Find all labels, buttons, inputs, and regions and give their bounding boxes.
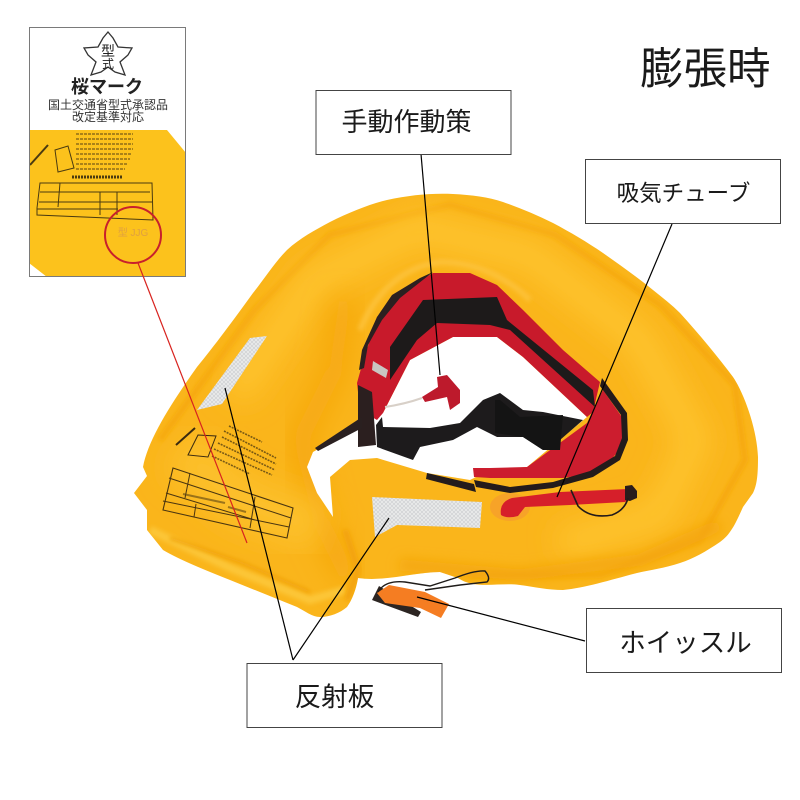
black waist strap and buckle — [315, 385, 583, 492]
label: inflation tube: 吸気チューブ — [617, 181, 750, 206]
inset: sakura mark detail — [29, 27, 186, 277]
label: reflector — [247, 664, 442, 728]
mark description: 国土交通省型式承認品 — [48, 98, 168, 112]
stamped mark: 型 JJG — [118, 226, 148, 239]
inset: sakura mark detail: 改定基準対応 — [72, 109, 144, 124]
leader line: whistle — [417, 597, 585, 641]
label: manual handle — [316, 90, 511, 154]
label: reflector: 反射板 — [295, 682, 374, 712]
leader lines: reflector — [225, 388, 389, 660]
mark name: 桜マーク — [71, 77, 143, 97]
life vest illustration — [134, 194, 758, 618]
spec table — [37, 183, 153, 220]
label: manual handle: 手動作動策 — [341, 107, 472, 137]
inner opening — [307, 337, 587, 517]
leader line: inflation tube — [557, 224, 672, 497]
reflective panel: centre — [372, 497, 482, 537]
star mark: 式 — [102, 57, 114, 71]
warning text — [76, 134, 133, 169]
label: whistle: ホイッスル — [619, 628, 752, 658]
leader line: manual handle — [421, 154, 440, 375]
star mark — [84, 32, 132, 75]
printed warning label on vest — [163, 426, 293, 538]
table title — [72, 176, 123, 178]
warning pictogram — [30, 145, 74, 172]
label: whistle — [586, 608, 782, 672]
inflated yellow bladder — [134, 194, 758, 617]
red highlight circle — [105, 207, 161, 263]
inset yellow vest photo — [29, 130, 186, 277]
red leader line — [138, 263, 247, 543]
heading: 膨張時 — [640, 46, 770, 94]
label: inflation tube — [586, 160, 780, 224]
red belt — [357, 272, 628, 493]
manual pull handle — [385, 375, 460, 410]
inflation tube — [490, 485, 637, 521]
star mark: 型 — [101, 43, 115, 59]
whistle with cord — [372, 571, 489, 618]
reflective panel: upper left — [197, 336, 267, 410]
